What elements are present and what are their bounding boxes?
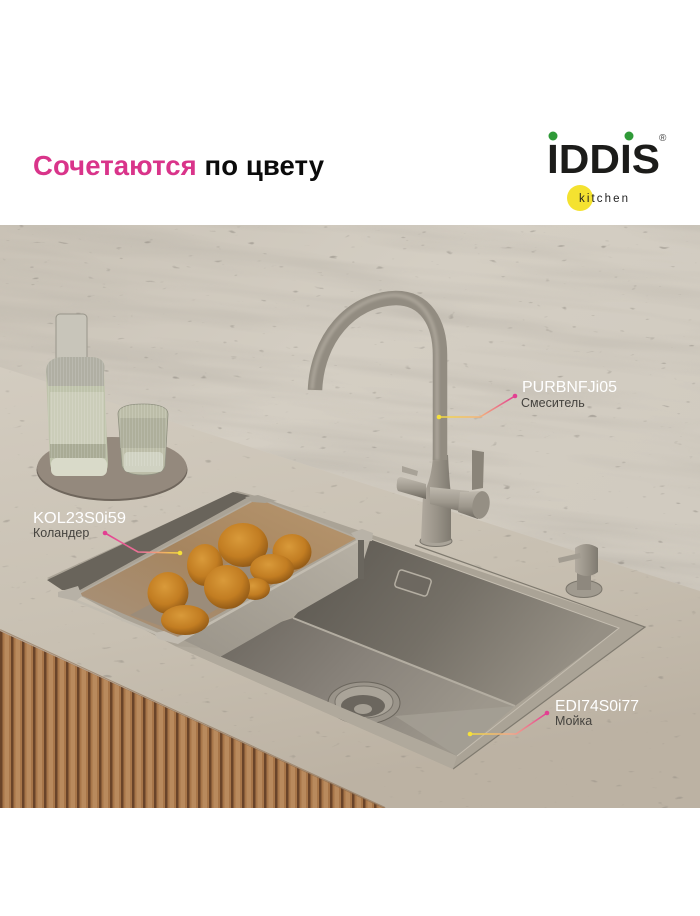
sink flange <box>47 491 645 769</box>
overflow plate <box>394 569 432 597</box>
colander interior <box>78 498 357 637</box>
countertop <box>0 438 700 808</box>
sink name: Мойка <box>555 714 592 728</box>
glass base <box>124 452 163 472</box>
logo kitchen word: kitchen <box>579 193 630 205</box>
callout: sink <box>468 698 639 736</box>
faucet body column <box>421 455 451 543</box>
cylinder end <box>458 491 482 519</box>
glass ribs <box>118 404 168 466</box>
faucet base <box>420 536 452 546</box>
wood top shadow <box>0 630 385 808</box>
logo wordmark: IDDIS <box>547 136 660 182</box>
orange 1 <box>272 534 312 570</box>
colander SKU: KOL23S0i59 <box>33 510 126 527</box>
orange 4 <box>250 554 294 584</box>
orange 6 <box>204 565 250 609</box>
clip left <box>58 586 82 601</box>
faucet SKU: PURBNFJi05 <box>522 379 617 396</box>
photo: kitchen scene <box>0 225 700 808</box>
sink leader line <box>470 713 547 734</box>
orange 7 <box>148 572 188 614</box>
faucet name: Смеситель <box>521 396 585 410</box>
flange inner edge <box>365 537 619 756</box>
logo yellow circle <box>567 185 593 211</box>
horizontal lever arm <box>430 487 476 515</box>
colander yellow dot <box>178 551 182 555</box>
callout: colander <box>33 510 182 555</box>
mat under glassware <box>36 437 188 501</box>
water glass <box>118 404 168 475</box>
dispenser column <box>577 570 591 590</box>
sink basin rear wall <box>293 537 619 706</box>
faucet leader line <box>439 396 515 417</box>
title: Сочетаются по цвету <box>33 150 325 181</box>
glass body <box>118 404 168 475</box>
carafe ribs <box>46 357 108 458</box>
cylinder cap <box>470 490 492 520</box>
carafe lower band <box>50 444 106 458</box>
carafe <box>46 314 108 476</box>
wall travertine bands <box>88 225 700 570</box>
faucet yellow dot <box>437 415 441 419</box>
sink SKU: EDI74S0i77 <box>555 698 639 715</box>
colander rim <box>90 540 358 634</box>
swivel spout <box>315 298 440 460</box>
spout highlight <box>312 295 437 460</box>
sink pink dot <box>545 711 549 715</box>
left handle top <box>402 466 418 476</box>
colander pink dot <box>103 531 107 535</box>
colander floor <box>130 548 273 626</box>
callout: faucet <box>437 379 617 419</box>
soap dispenser <box>558 544 602 598</box>
dark slot <box>47 492 250 590</box>
orange 8 <box>161 605 209 635</box>
faucet pink dot <box>513 394 517 398</box>
wooden slat panel <box>0 631 385 808</box>
wall specks <box>0 225 700 595</box>
clip right <box>351 529 373 542</box>
colander <box>47 492 373 657</box>
logo green dot right <box>624 132 634 140</box>
lever blade <box>472 450 484 490</box>
registered mark: ® <box>659 133 667 144</box>
orange 3 <box>218 523 268 567</box>
logo green dot left <box>548 132 558 140</box>
left handle arm <box>397 477 426 499</box>
carafe neck <box>56 314 87 364</box>
flange outer edge <box>415 545 645 769</box>
basin lower wedge highlight <box>396 706 514 744</box>
clip bottom <box>154 630 196 644</box>
dispenser base <box>566 580 602 598</box>
countertop specks <box>0 367 700 808</box>
colander leader line <box>105 533 180 553</box>
carafe base <box>51 458 107 476</box>
clip top <box>245 495 277 503</box>
glass water <box>120 418 166 448</box>
oranges <box>148 523 312 635</box>
colander front wall <box>183 534 372 657</box>
front rim of sink over drain <box>200 648 454 769</box>
orange 2 <box>187 544 223 586</box>
faucet <box>312 295 492 546</box>
carafe lighter water <box>50 392 104 444</box>
colander name: Коландер <box>33 526 89 540</box>
back rim <box>78 498 357 594</box>
carafe shoulder <box>46 357 104 386</box>
sink basin floor <box>200 618 515 756</box>
basin crease highlight <box>293 618 515 706</box>
sink yellow dot <box>468 732 472 736</box>
dispenser head <box>575 544 598 576</box>
logo: IDDIS kitchen <box>547 132 667 211</box>
clip right leg <box>358 540 364 579</box>
orange 5 <box>240 578 270 600</box>
dispenser nozzle <box>558 553 581 563</box>
stone wall <box>0 225 700 591</box>
drain strainer <box>328 682 400 724</box>
carafe body <box>46 357 108 476</box>
